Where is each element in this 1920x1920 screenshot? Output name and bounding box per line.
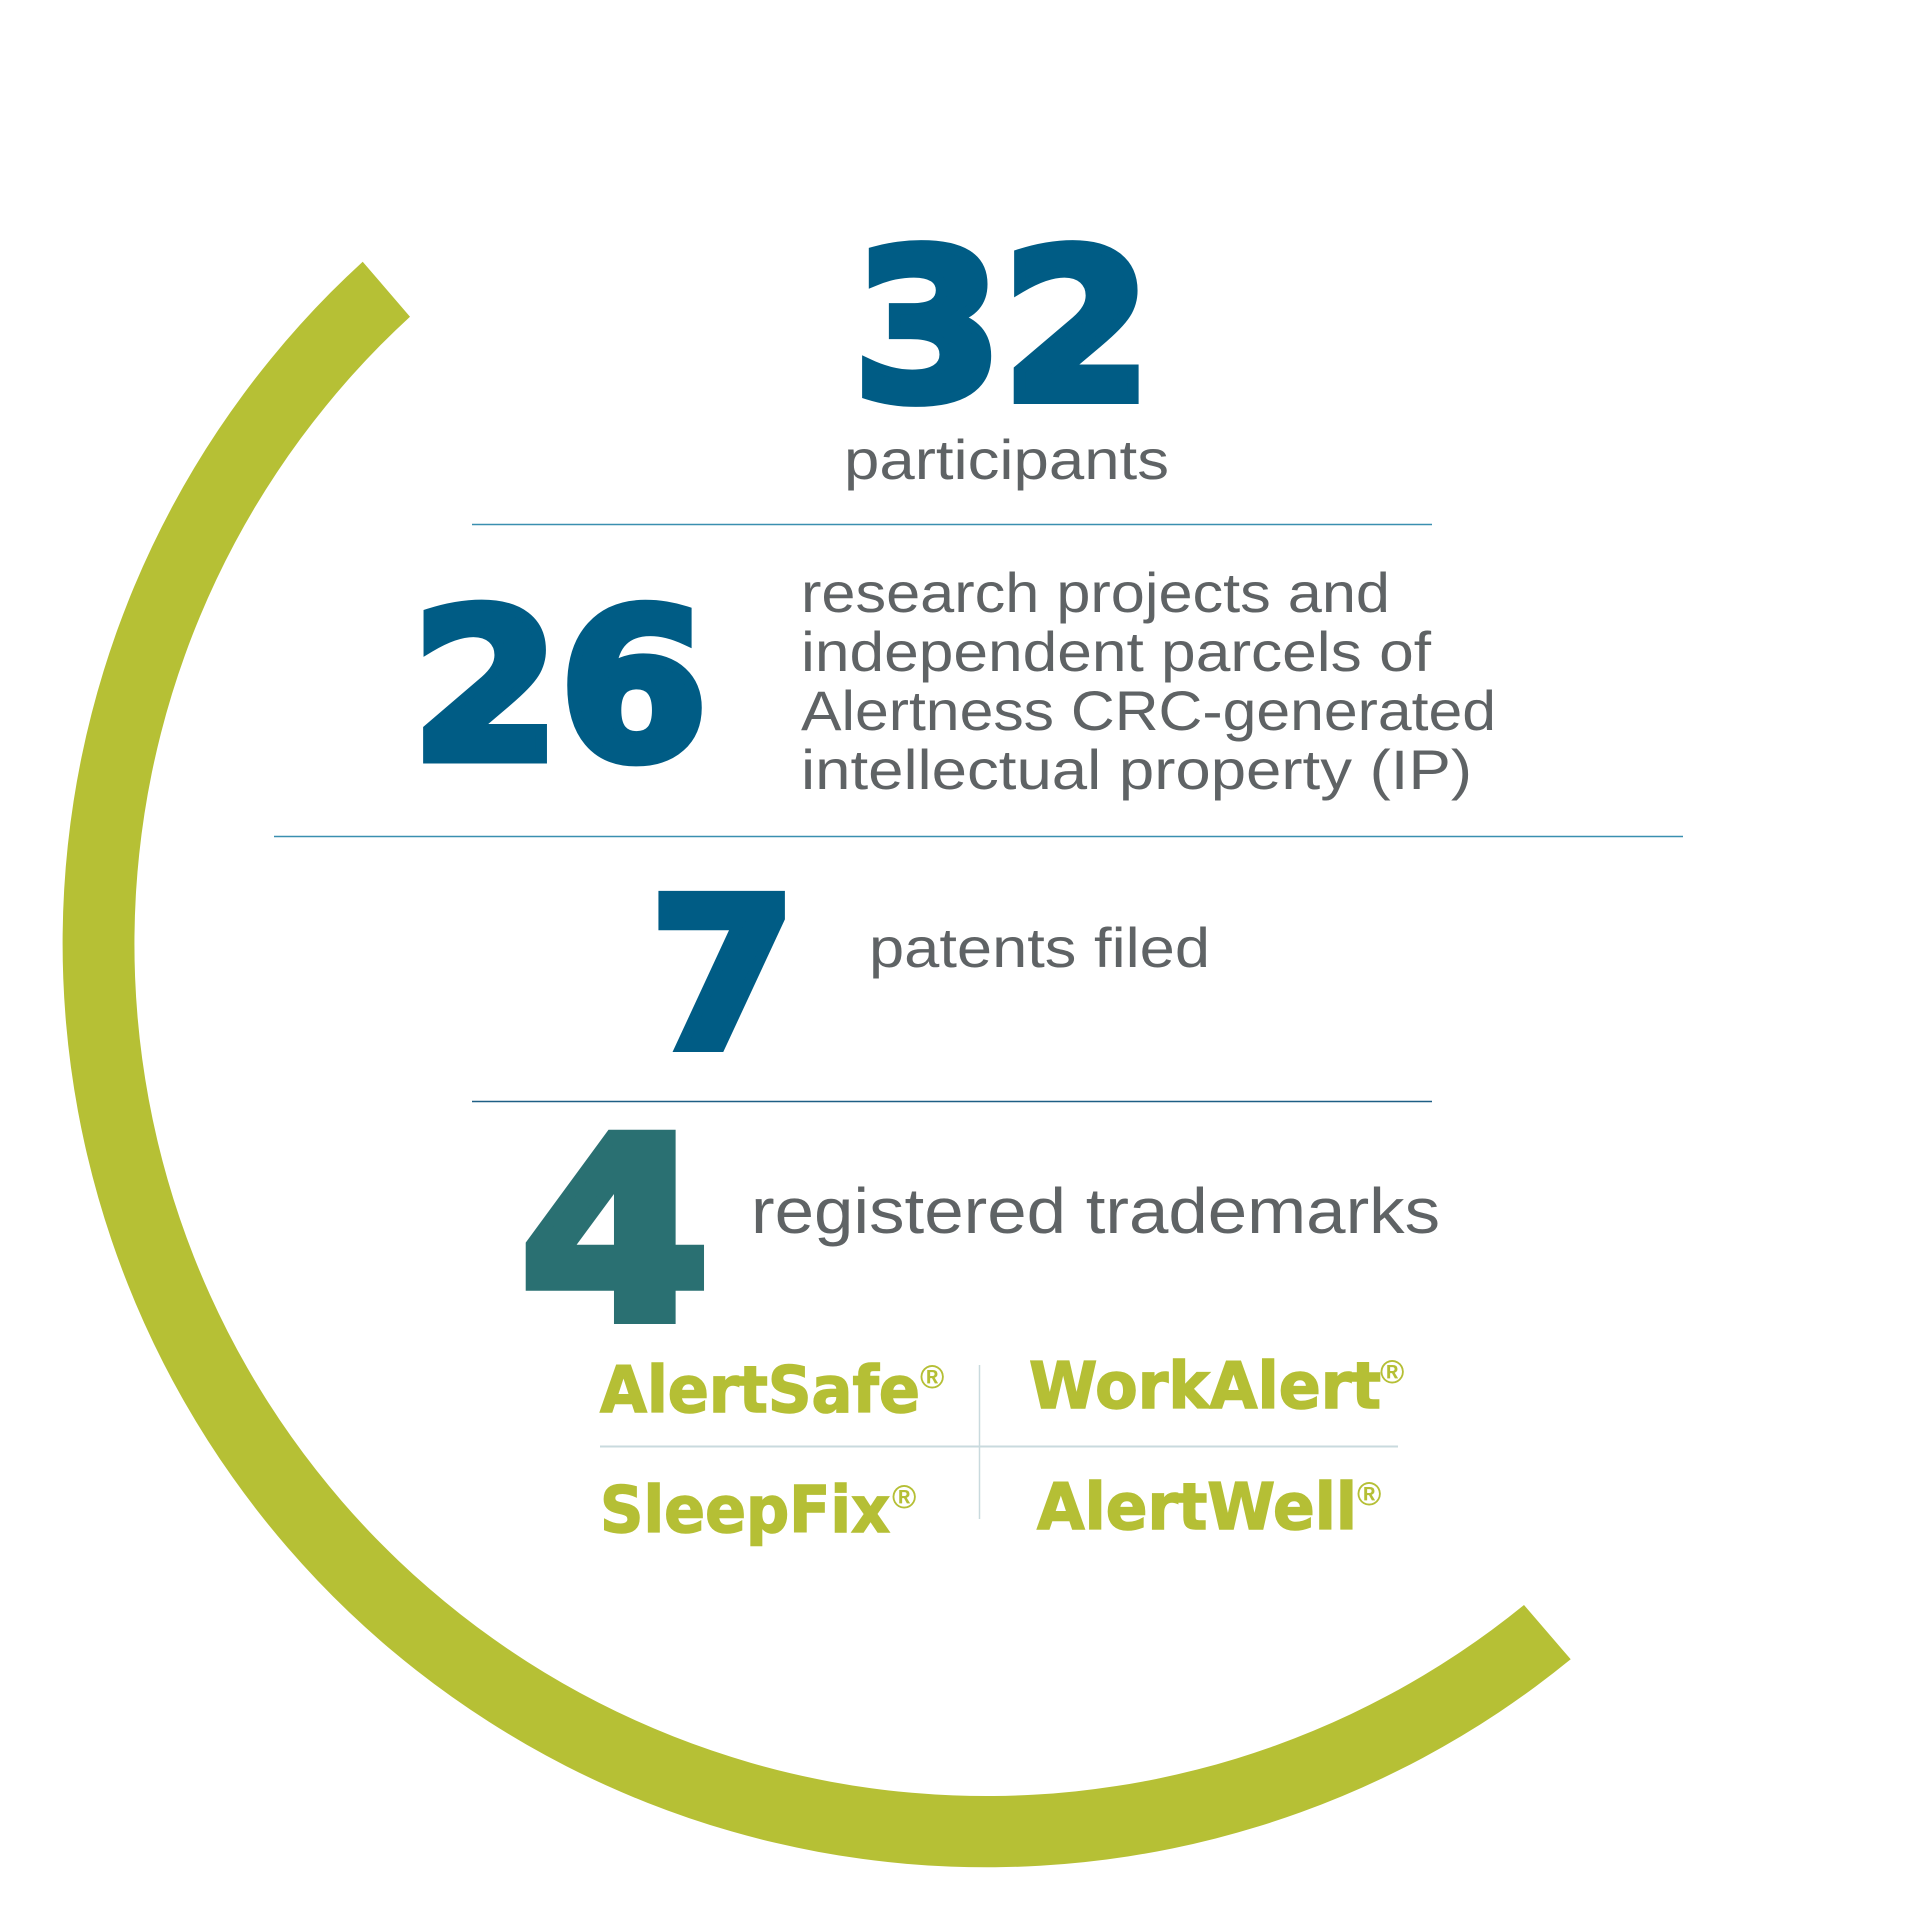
number: 7: 7	[650, 856, 796, 1096]
label: research projects: intellectual property (IP)	[801, 738, 1472, 801]
brand: WorkAlert: ®	[1380, 1353, 1404, 1390]
brand: AlertWell: ®	[1357, 1475, 1381, 1512]
trademark grid	[600, 1350, 1404, 1548]
label: research projects: research projects and	[801, 561, 1390, 624]
label: patents filed: patents filed	[869, 916, 1210, 979]
stat: 7 patents filed	[650, 856, 1210, 1096]
stat: 32 participants	[844, 208, 1169, 491]
label: research projects: independent parcels of	[801, 620, 1431, 683]
label: research projects	[801, 561, 1496, 801]
brand: SleepFix: ®	[892, 1478, 916, 1515]
label: registered trademarks: registered trademarks	[751, 1175, 1440, 1247]
number: 32: 32	[854, 208, 1152, 448]
stat: 26 research projects	[412, 561, 1496, 807]
brand: AlertSafe: ®	[920, 1358, 944, 1395]
brand: SleepFix: SleepFix	[600, 1474, 890, 1548]
brand: WorkAlert: WorkAlert	[1029, 1350, 1381, 1424]
green circular arc	[63, 262, 1571, 1867]
label: participants: participants	[844, 428, 1169, 491]
number: 4: 4	[520, 1086, 710, 1377]
number: 26: 26	[412, 567, 708, 807]
brand: AlertSafe: AlertSafe	[600, 1354, 920, 1428]
label: research projects: Alertness CRC-generated	[801, 679, 1496, 742]
brand: AlertWell: AlertWell	[1037, 1471, 1357, 1545]
stat: 4 registered trademarks	[520, 1086, 1440, 1377]
